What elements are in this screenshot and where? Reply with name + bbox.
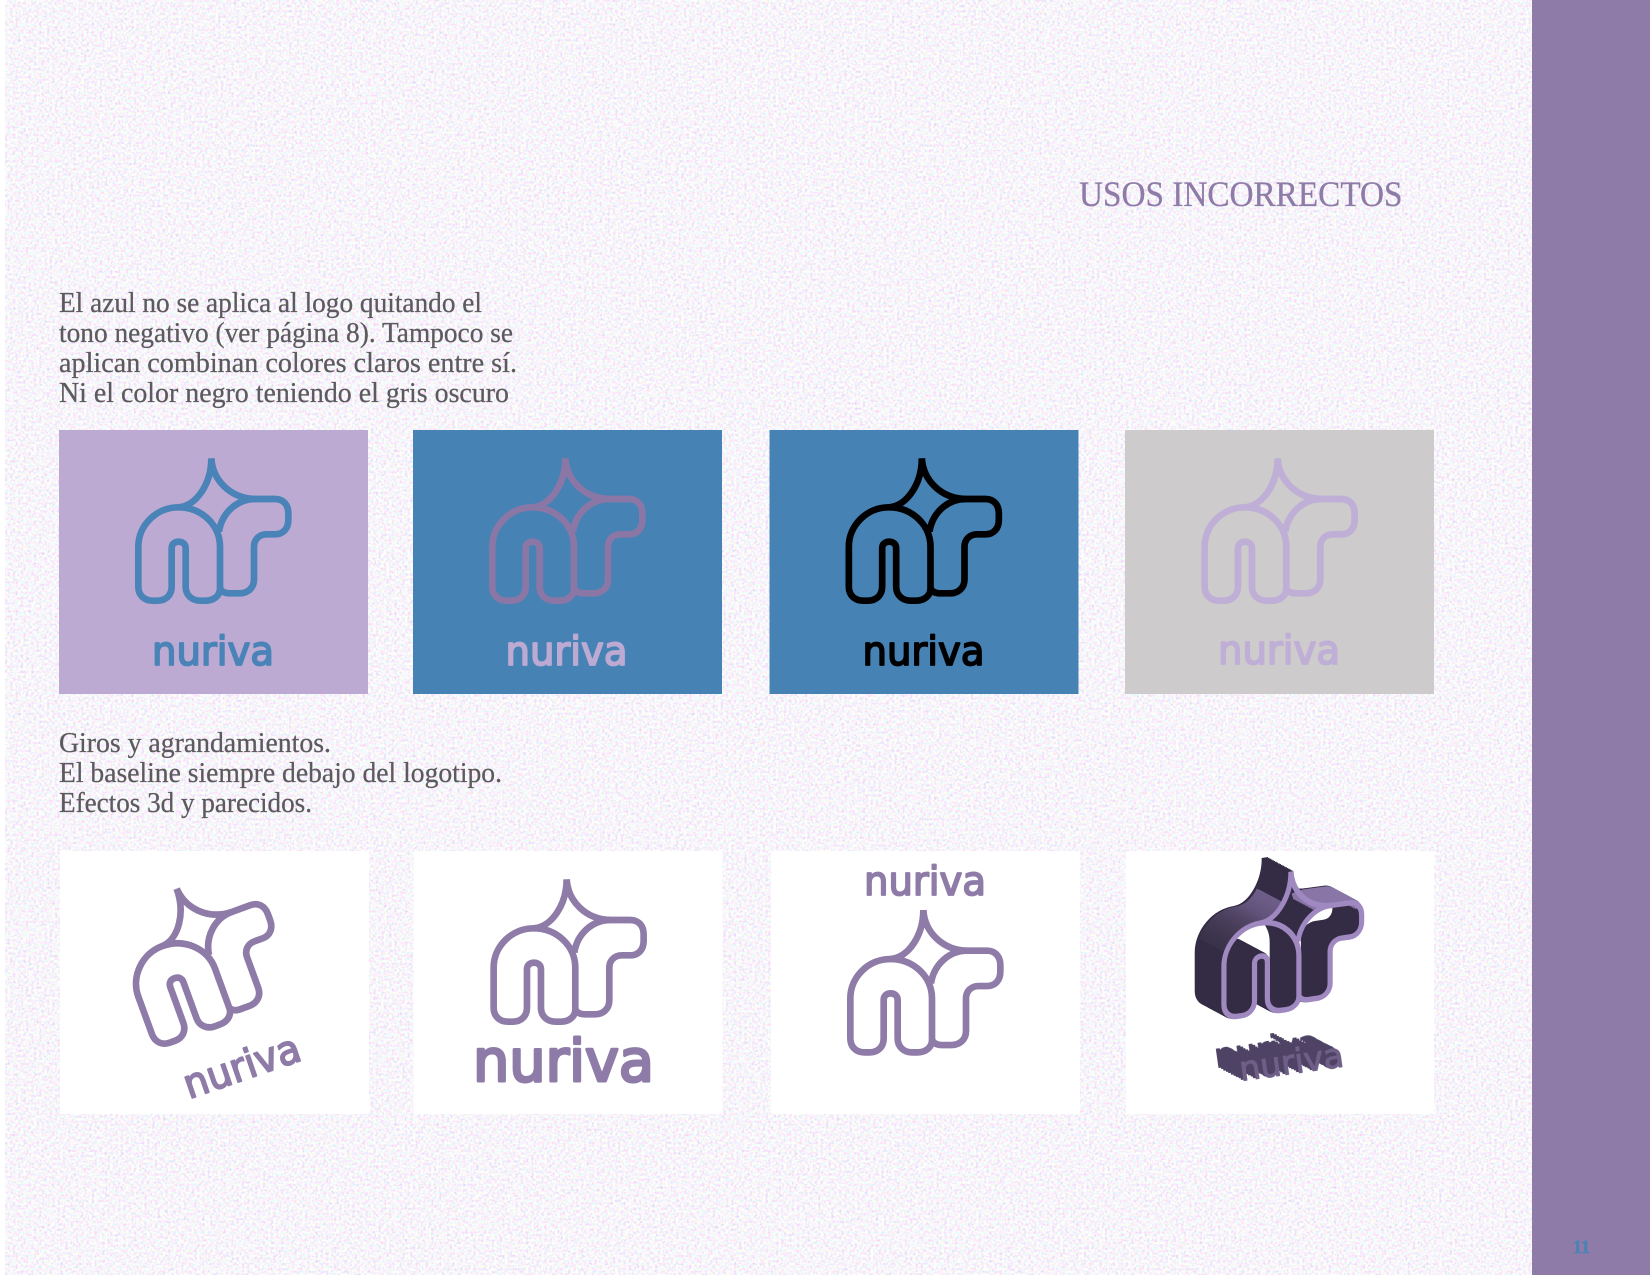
wordmark above: nuriva — [864, 859, 986, 905]
icon: extruded logo — [1198, 844, 1362, 1022]
wordmark: nuriva — [1218, 628, 1340, 674]
text block: colour misuse: tono negativo (ver página 8). Tampoco se — [59, 318, 513, 349]
text block: form misuse: El baseline siempre debajo del logotipo. — [59, 758, 502, 789]
panel: enlarged wordmark — [414, 851, 722, 1114]
panel: black logo on blue — [770, 430, 1078, 694]
text block: form misuse: Giros y agrandamientos. — [59, 728, 331, 759]
page number: 11 — [1573, 1237, 1590, 1258]
icon: logo black — [849, 458, 999, 601]
wordmark: nuriva — [152, 629, 274, 675]
icon: logo — [850, 910, 1000, 1052]
icon: logo purple — [492, 458, 642, 601]
text block: colour misuse: aplican combinan colores claros entre sí. — [59, 348, 517, 379]
text block: colour misuse: Ni el color negro teniendo el gris oscuro — [59, 378, 509, 409]
icon: logo — [494, 879, 644, 1022]
panel: 3d effect — [1126, 844, 1434, 1114]
text block: colour misuse: El azul no se aplica al logo quitando el — [59, 288, 482, 319]
panel: wordmark above logo — [771, 851, 1080, 1114]
text block: colour misuse — [59, 288, 517, 409]
icon: logo lilac — [1205, 458, 1355, 601]
title: USOS INCORRECTOS — [1079, 174, 1402, 214]
icon: logo blue — [138, 458, 288, 601]
wordmark extruded: nuriva — [1237, 1036, 1346, 1090]
panel: blue logo on lilac — [59, 430, 368, 694]
wordmark rotated: nuriva — [177, 1026, 307, 1108]
panel: purple logo on blue — [413, 430, 722, 694]
wordmark: nuriva — [862, 629, 984, 675]
text block: form misuse: Efectos 3d y parecidos. — [59, 788, 312, 819]
text block: form misuse — [59, 728, 502, 819]
panel: rotated logo — [60, 851, 369, 1114]
icon: rotated logo — [108, 862, 298, 1047]
panel: light logo on grey — [1125, 430, 1434, 694]
wordmark large: nuriva — [473, 1027, 654, 1095]
right sidebar — [1532, 0, 1650, 1275]
wordmark: nuriva — [506, 629, 628, 675]
